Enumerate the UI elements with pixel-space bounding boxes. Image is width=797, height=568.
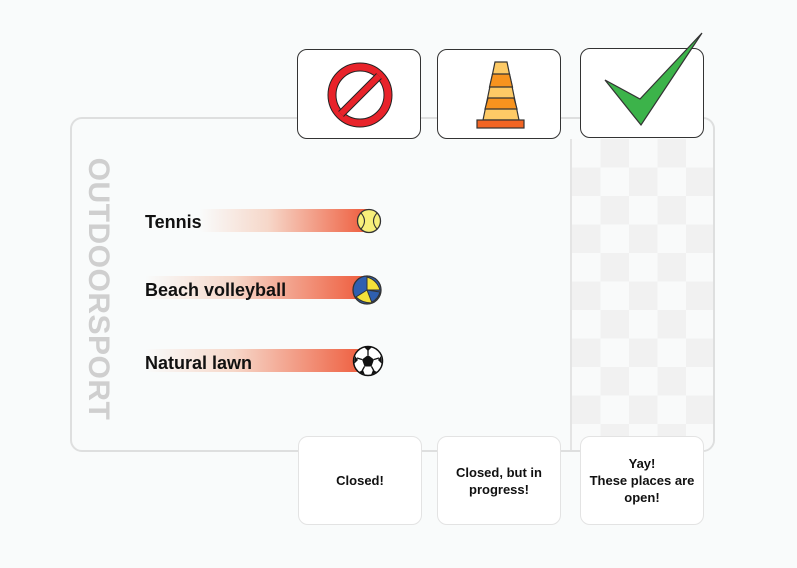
label: closed	[298, 436, 422, 525]
label: natural lawn: Natural lawn	[145, 353, 252, 373]
bar: tennis	[200, 209, 370, 232]
icon: soccer ball	[352, 346, 384, 376]
checkerboard column	[570, 139, 713, 450]
icon box: cone	[437, 49, 561, 139]
icon: traffic cone	[476, 61, 525, 129]
icon box: check	[580, 48, 704, 138]
label: in progress: progress!	[469, 482, 529, 496]
label: open	[580, 436, 704, 525]
label: open: open!	[624, 490, 660, 505]
vertical title: OUTDOORSPORT	[82, 158, 115, 420]
panel: outdoor sport	[70, 117, 715, 452]
icon: volleyball	[352, 275, 382, 305]
label: tennis: Tennis	[145, 212, 202, 232]
icon: prohibited	[328, 62, 392, 128]
icon: tennis ball	[356, 208, 382, 234]
bar: natural lawn	[145, 349, 367, 372]
icon: check mark	[604, 32, 702, 126]
row: natural lawn	[145, 346, 384, 376]
icon box: no sign	[297, 49, 421, 139]
label: beach volleyball: Beach volleyball	[145, 280, 286, 300]
label: open: These places are	[590, 473, 694, 488]
label: in progress	[437, 436, 561, 525]
label: open: Yay!	[629, 456, 655, 471]
label: closed: Closed!	[336, 473, 384, 488]
row: tennis	[145, 208, 382, 234]
label: in progress: Closed, but in	[456, 464, 542, 480]
bar: volleyball	[145, 276, 367, 299]
row: beach volleyball	[145, 275, 382, 305]
